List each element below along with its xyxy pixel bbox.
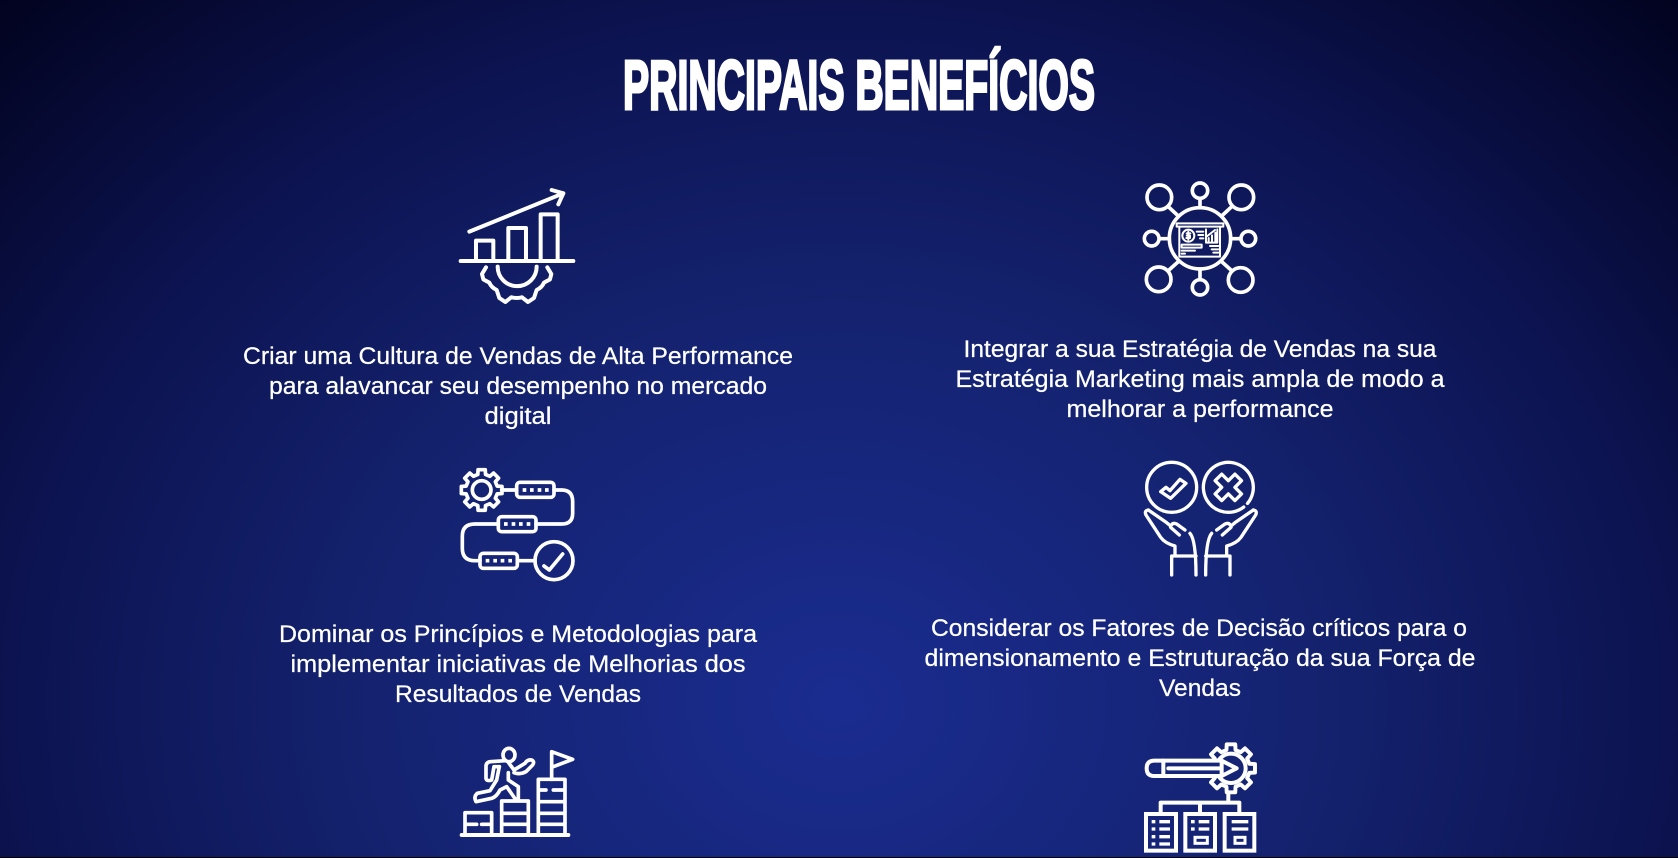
text: high performance sales culture: para alavancar seu desempenho no mercado xyxy=(269,373,767,400)
text: integrate sales and marketing strategy: Estratégia Marketing mais ampla de modo a xyxy=(956,366,1445,393)
icon: hands holding check and cross xyxy=(1145,462,1256,575)
text: high performance sales culture: digital xyxy=(484,403,552,430)
title: PRINCIPAIS BENEFÍCIOS xyxy=(623,46,1095,124)
text: principles and methodologies: Resultados de Vendas xyxy=(395,681,641,708)
text: decision factors for sales force: dimensionamento e Estruturação da sua Força de xyxy=(924,645,1476,672)
text: decision factors for sales force xyxy=(924,615,1476,702)
icon: network hub with presentation board xyxy=(1144,183,1256,295)
text: principles and methodologies xyxy=(279,621,757,708)
text: integrate sales and marketing strategy xyxy=(956,336,1445,423)
text: high performance sales culture: Criar uma Cultura de Vendas de Alta Performance xyxy=(243,343,793,370)
icon: pencil, gear and document hierarchy xyxy=(1146,744,1255,851)
icon: growth chart over gear xyxy=(461,190,573,302)
text: decision factors for sales force: Considerar os Fatores de Decisão críticos para o xyxy=(931,615,1467,642)
text: high performance sales culture xyxy=(243,343,793,430)
text: principles and methodologies: Dominar os Princípios e Metodologias para xyxy=(279,621,757,648)
icon: process flow from gear to check xyxy=(461,470,573,580)
text: integrate sales and marketing strategy: melhorar a performance xyxy=(1066,396,1334,423)
text: decision factors for sales force: Vendas xyxy=(1159,675,1241,702)
text: integrate sales and marketing strategy: Integrar a sua Estratégia de Vendas na sua xyxy=(964,336,1437,363)
text: principles and methodologies: implementar iniciativas de Melhorias dos xyxy=(290,651,746,678)
icon: runner climbing steps to flag xyxy=(462,748,573,835)
